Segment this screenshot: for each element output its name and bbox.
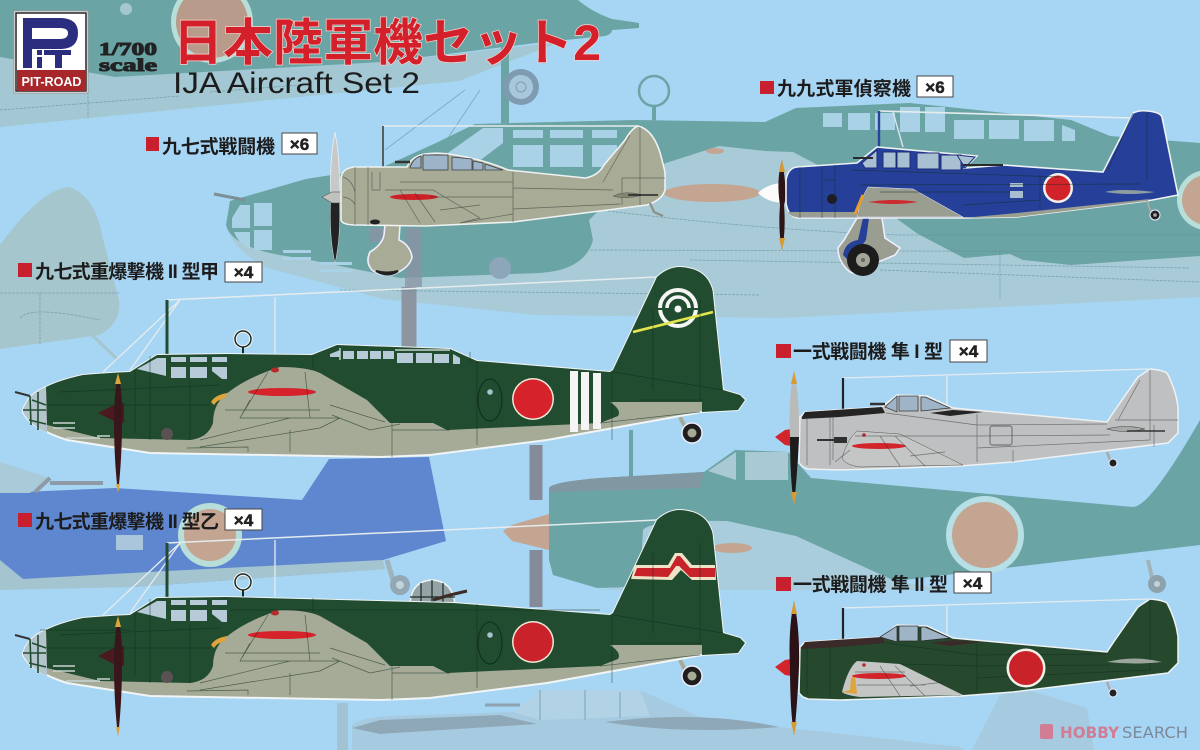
logo: Pit-Road: PIT-ROAD bbox=[22, 74, 82, 89]
aircraft: Type 97 heavy bomber II ko bbox=[15, 267, 745, 493]
label: Type 97 fighter: 九七式戦闘機 bbox=[162, 136, 275, 158]
label: Type 97 bomber II otsu: 九七式重爆撃機 II 型乙 bbox=[35, 511, 219, 533]
aircraft: Type 99 reconnaissance bbox=[758, 111, 1178, 276]
title: Japanese: 日本陸軍機セット2 bbox=[173, 15, 601, 71]
faded aircraft: bottom fuselage and canopy bbox=[337, 689, 1094, 750]
faded aircraft: strut, wheel and ring top centre bbox=[385, 20, 669, 150]
label: Type 97 bomber II otsu: ×4 bbox=[234, 511, 254, 530]
scale text: 1/700 bbox=[99, 39, 157, 59]
faded aircraft: right edge roundel bbox=[1177, 170, 1200, 230]
label: Hayabusa II bbox=[776, 572, 991, 596]
watermark: Hobby Search: SEARCH bbox=[1122, 723, 1188, 742]
aircraft: Type 97 fighter bbox=[322, 126, 665, 275]
title: English: IJA Aircraft Set 2 bbox=[173, 67, 420, 100]
scale text bbox=[99, 39, 157, 75]
watermark: Hobby Search: HOBBY bbox=[1060, 723, 1119, 742]
label: Type 97 fighter bbox=[146, 133, 317, 158]
label: Hayabusa II: ×4 bbox=[963, 574, 983, 593]
label: Hayabusa I bbox=[776, 340, 987, 363]
label: Hayabusa I: ×4 bbox=[959, 342, 979, 361]
label: Type 99 recon: ×6 bbox=[925, 78, 945, 97]
aircraft: Hayabusa type II bbox=[775, 599, 1178, 735]
aircraft: Hayabusa type I bbox=[775, 369, 1178, 505]
label: Type 97 bomber II otsu bbox=[18, 509, 262, 533]
label: Hayabusa II: 一式戦闘機 隼 II 型 bbox=[793, 574, 948, 596]
faded aircraft: lower centre green fuselage bbox=[503, 420, 1200, 607]
logo: Pit-Road bbox=[14, 11, 88, 93]
faded aircraft: left tail fin bbox=[0, 187, 120, 360]
label: Type 99 recon: 九九式軍偵察機 bbox=[777, 78, 911, 100]
label: Type 97 bomber II ko: ×4 bbox=[234, 263, 254, 282]
scale text: scale bbox=[99, 55, 157, 75]
label: Type 99 recon bbox=[760, 76, 953, 100]
label: Hayabusa I: 一式戦闘機 隼 I 型 bbox=[793, 341, 943, 363]
label: Type 97 bomber II ko: 九七式重爆撃機 II 型甲 bbox=[35, 261, 219, 283]
faded aircraft: large central fuselage bbox=[214, 103, 1200, 348]
faded aircraft: top left wing and fuselage bbox=[0, 0, 639, 127]
aircraft: Type 97 heavy bomber II otsu bbox=[15, 510, 745, 736]
label: Type 97 fighter: ×6 bbox=[290, 135, 309, 154]
faded aircraft: lower left blue fuselage bbox=[0, 457, 446, 595]
watermark: Hobby Search bbox=[1040, 723, 1188, 742]
